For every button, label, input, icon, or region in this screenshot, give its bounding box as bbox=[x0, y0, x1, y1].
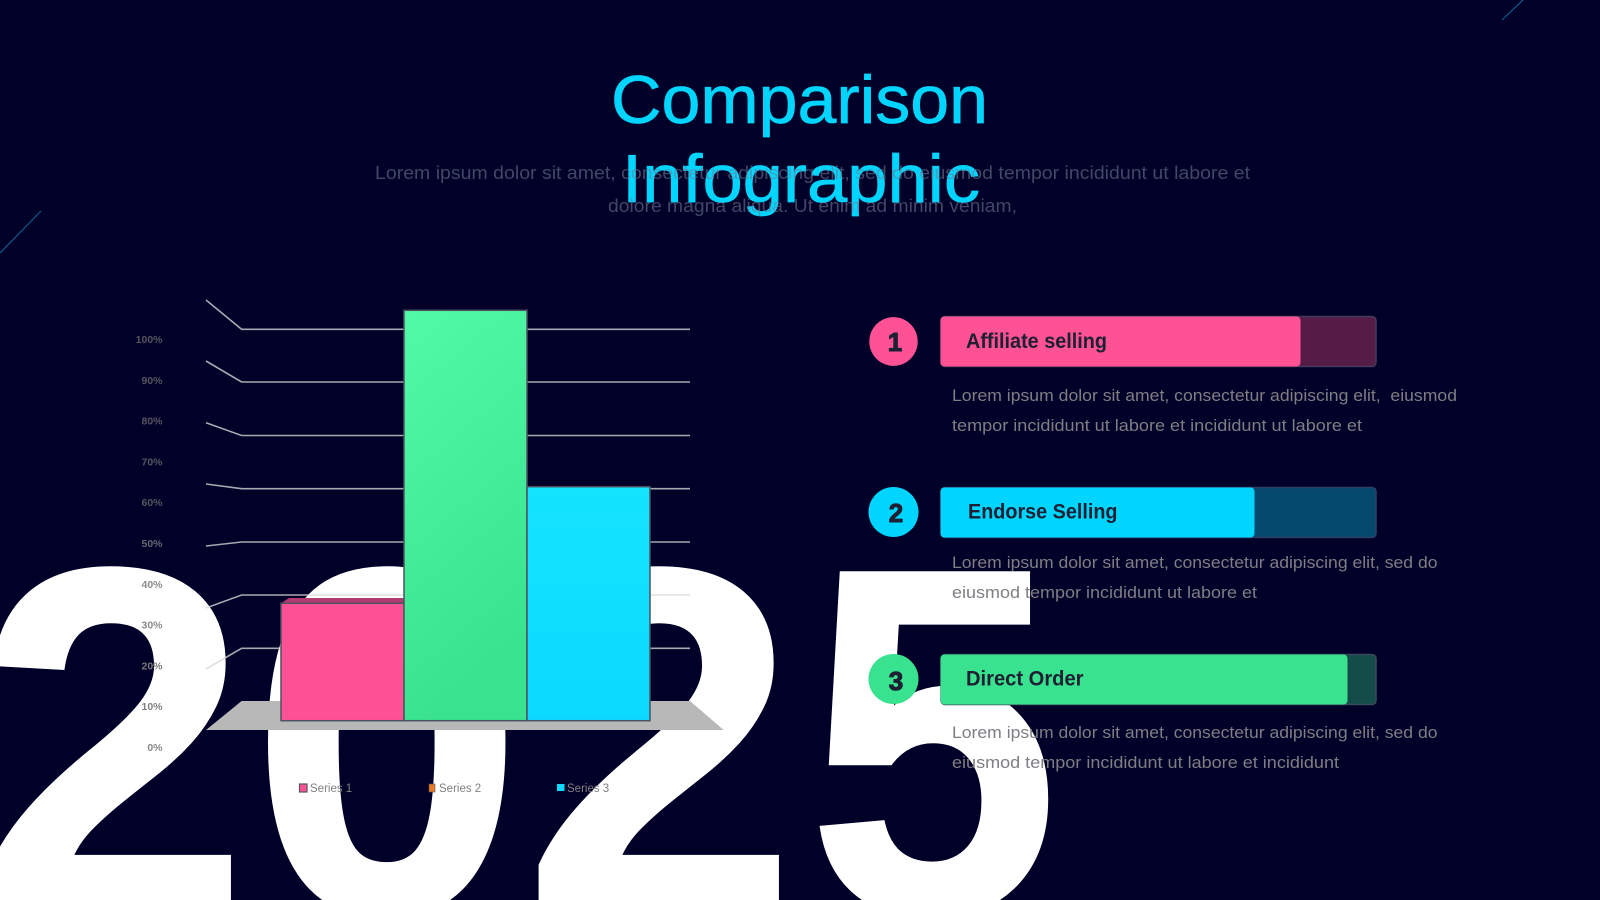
legend bbox=[300, 783, 609, 795]
badge 3 bbox=[868, 654, 918, 704]
item 1: affiliate selling bbox=[869, 316, 1457, 435]
legend: Series 2 bbox=[439, 783, 481, 795]
axis labels: 60% bbox=[141, 497, 163, 509]
title: Comparison bbox=[611, 62, 988, 138]
axis labels: 100% bbox=[136, 334, 163, 346]
description 2: eiusmod tempor incididunt ut labore et bbox=[952, 583, 1257, 602]
badge 1 bbox=[869, 317, 918, 366]
title: Infographic bbox=[622, 141, 980, 217]
axis labels: 80% bbox=[141, 416, 163, 428]
axis labels bbox=[136, 334, 163, 754]
3D column chart bbox=[136, 300, 724, 795]
item 2: endorse selling bbox=[868, 487, 1438, 602]
badge 2: 2 bbox=[889, 498, 903, 528]
axis labels: 30% bbox=[141, 620, 163, 632]
legend: Series 1 bbox=[310, 783, 352, 795]
axis labels: 10% bbox=[141, 701, 163, 713]
progress bar 2 bbox=[940, 488, 1376, 538]
badge 1: 1 bbox=[888, 327, 902, 357]
item 3: direct order bbox=[868, 654, 1438, 772]
description 2 bbox=[952, 553, 1438, 602]
description 3 bbox=[952, 723, 1438, 772]
progress bar 2: Endorse Selling bbox=[968, 500, 1118, 524]
progress bar 1: Affiliate selling bbox=[966, 330, 1107, 353]
chart floor bbox=[206, 701, 724, 730]
axis labels: 40% bbox=[141, 579, 163, 591]
badge 2 bbox=[868, 487, 918, 537]
progress bar 1 bbox=[940, 316, 1376, 366]
description 1 bbox=[952, 386, 1457, 435]
subtitle bbox=[375, 162, 1250, 216]
description 1: tempor incididunt ut labore et incididunt ut labore et bbox=[952, 416, 1362, 435]
badge 3: 3 bbox=[889, 666, 903, 696]
description 1: Lorem ipsum dolor sit amet, consectetur adipiscing elit, eiusmod bbox=[952, 386, 1457, 405]
progress bar 3: Direct Order bbox=[966, 668, 1084, 690]
axis labels: 90% bbox=[141, 375, 163, 387]
progress bar 3 bbox=[940, 654, 1376, 704]
decorative diagonal accent left bbox=[0, 211, 41, 253]
axis labels: 20% bbox=[141, 660, 163, 672]
legend: Series 3 bbox=[567, 783, 609, 795]
subtitle: Lorem ipsum dolor sit amet, consectetur adipiscing elit, sed do eiusmod tempor incididunt ut labore et bbox=[375, 162, 1250, 183]
description 3: eiusmod tempor incididunt ut labore et incididunt bbox=[952, 753, 1339, 772]
chart gridlines bbox=[206, 300, 690, 669]
axis labels: 0% bbox=[147, 742, 163, 754]
description 3: Lorem ipsum dolor sit amet, consectetur adipiscing elit, sed do bbox=[952, 723, 1438, 742]
decorative diagonal accent top right bbox=[1502, 0, 1523, 20]
subtitle: dolore magna aliqua. Ut enim ad minim veniam, bbox=[608, 195, 1017, 216]
green column bbox=[404, 310, 527, 721]
axis labels: 50% bbox=[141, 538, 163, 550]
description 2: Lorem ipsum dolor sit amet, consectetur adipiscing elit, sed do bbox=[952, 553, 1438, 572]
axis labels: 70% bbox=[141, 456, 163, 468]
cyan column bbox=[527, 487, 650, 721]
title bbox=[611, 62, 988, 217]
pink column bbox=[281, 598, 404, 721]
